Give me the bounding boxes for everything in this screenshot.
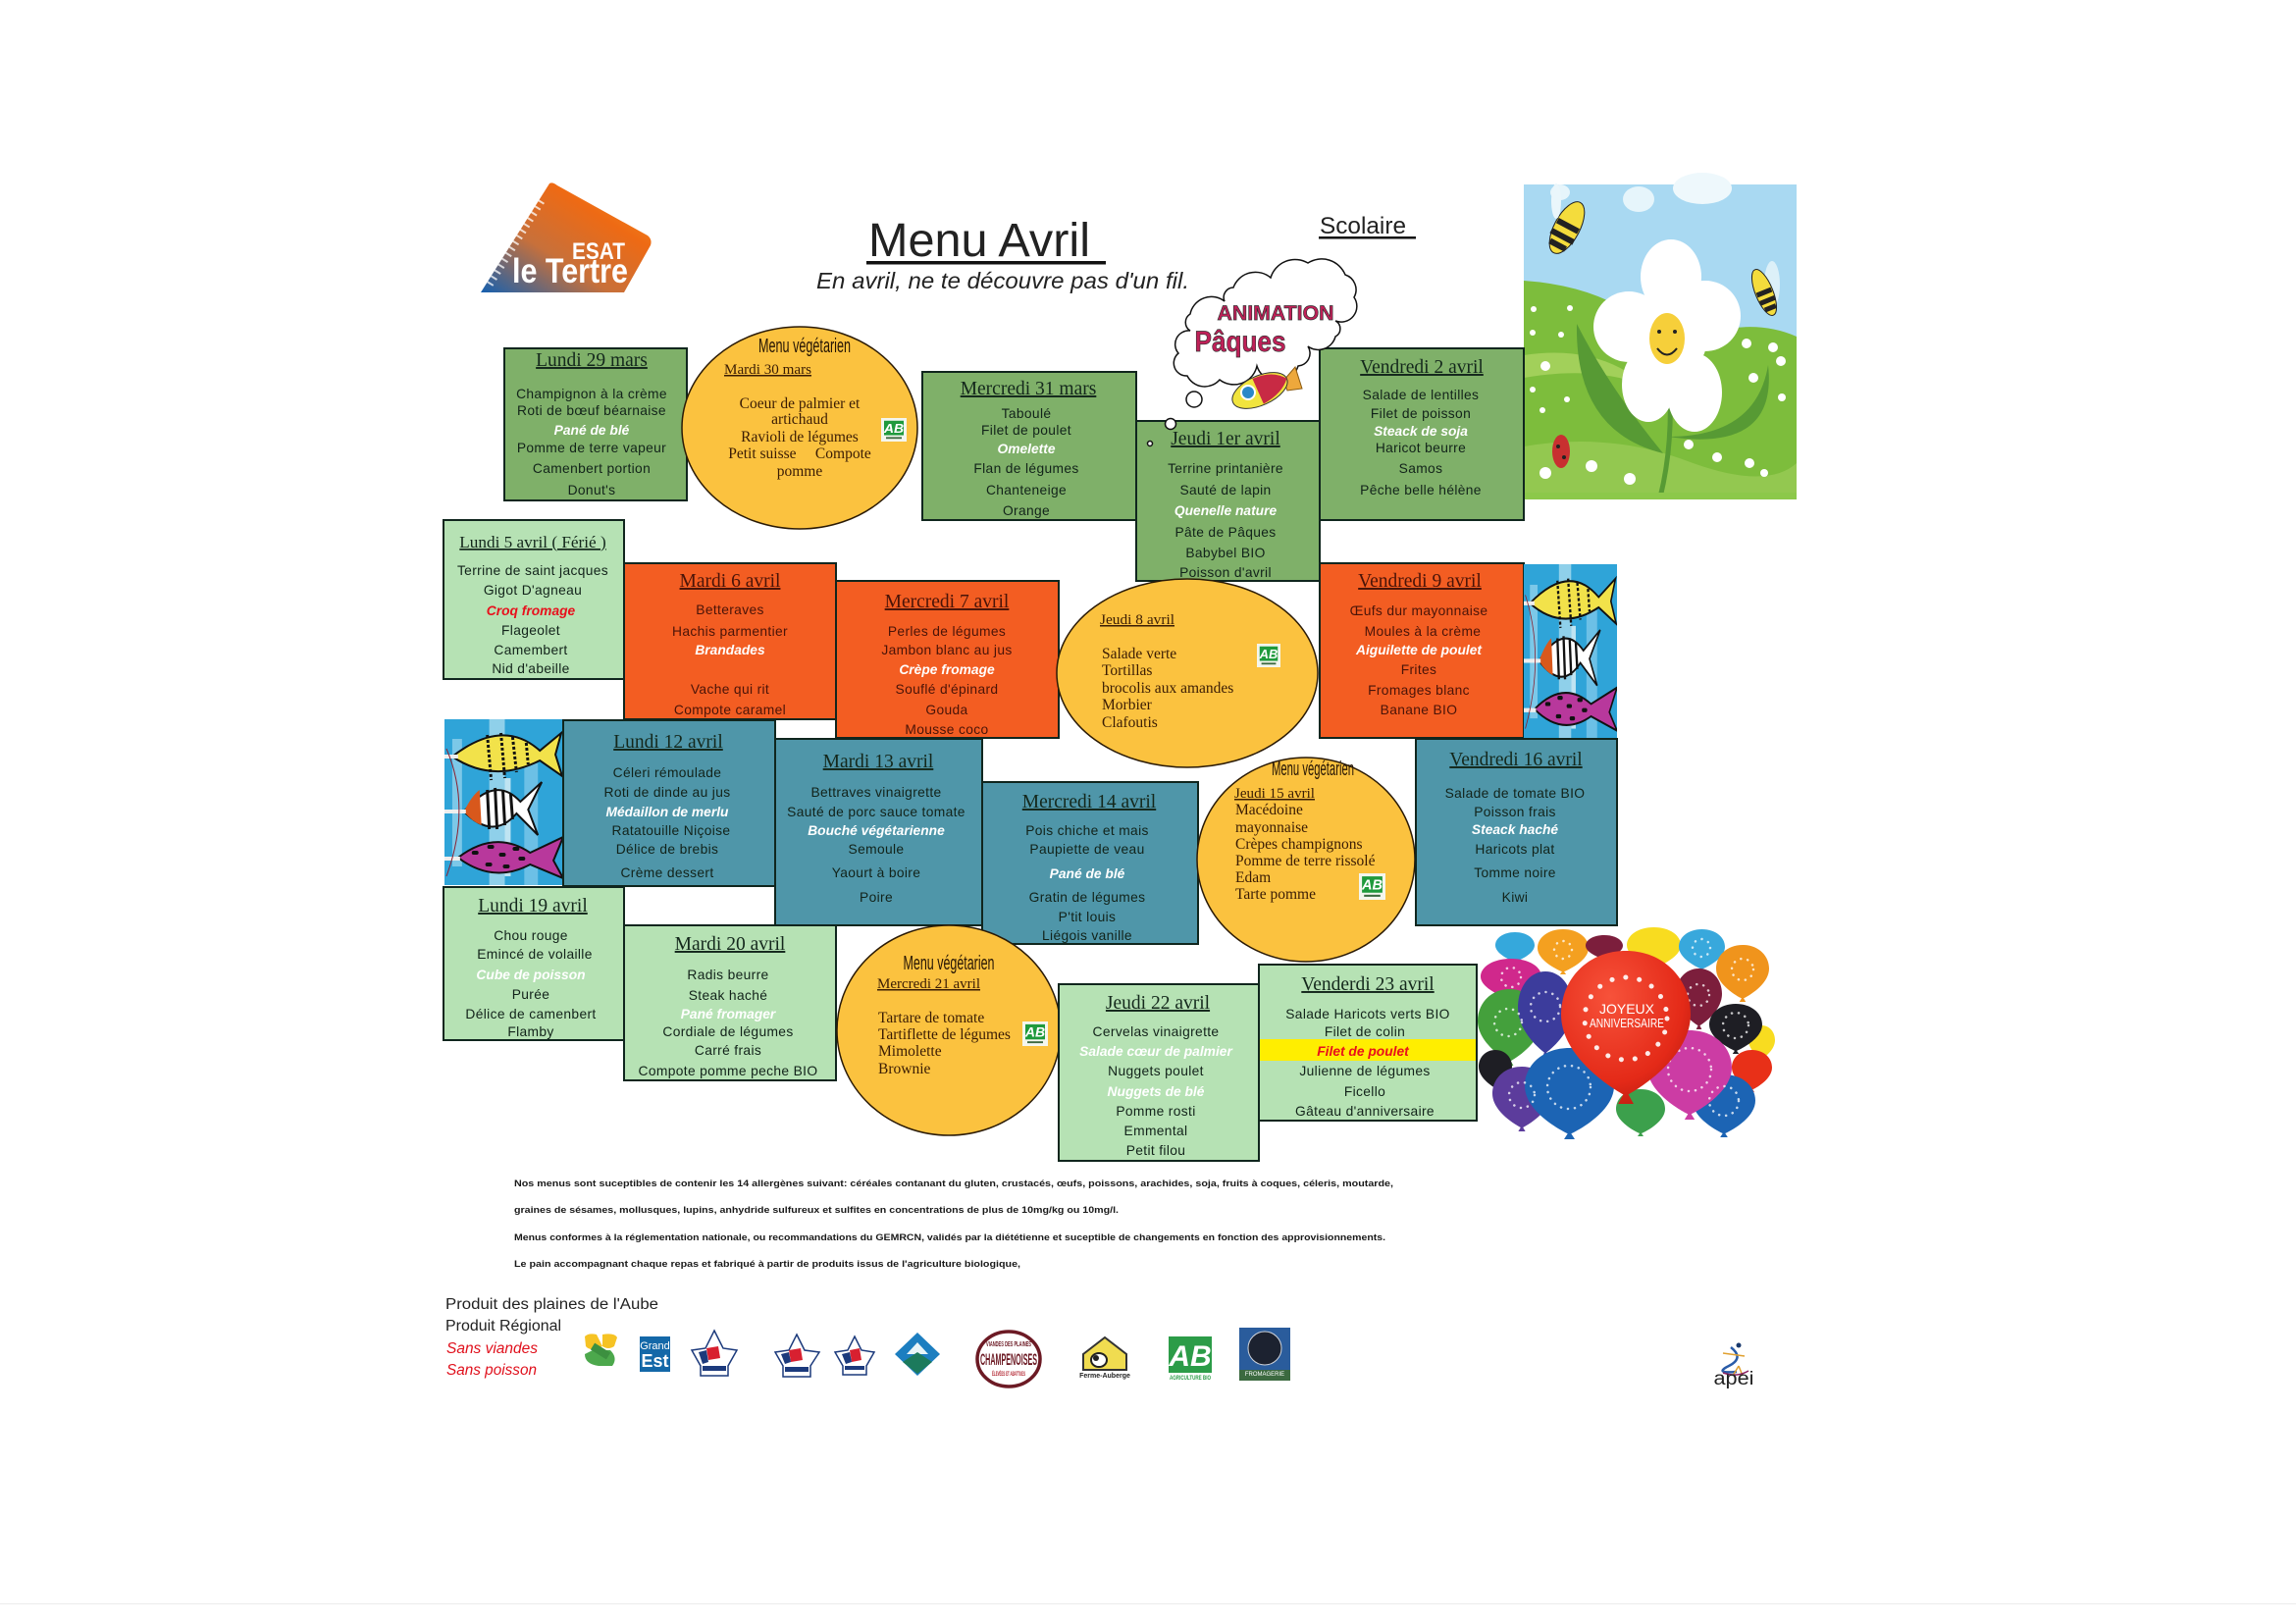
menu items: Champignon à la crème <box>516 387 667 401</box>
logo: origine française star <box>692 1331 737 1376</box>
menu items: Gâteau d'anniversaire <box>1295 1104 1435 1119</box>
panel: Mercredi 14 avril <box>982 782 1198 944</box>
panel: Mardi 13 avril <box>775 739 982 925</box>
menu items: Tartare de tomate <box>878 1010 984 1026</box>
menu items <box>1025 823 1149 943</box>
panel: Jeudi 1er avril <box>1136 421 1320 581</box>
menu items: Steak haché <box>689 988 767 1003</box>
illustration: fish right <box>1524 564 1617 738</box>
menu items: Sauté de lapin <box>1179 483 1272 497</box>
heading: Vendredi 2 avril <box>1360 357 1484 378</box>
menu items <box>1360 388 1482 497</box>
heading: Menu végétarien <box>903 953 995 974</box>
panel: Mardi 6 avril <box>624 563 836 719</box>
icon: AB bio <box>1022 1021 1048 1046</box>
menu items <box>639 968 817 1078</box>
panel: Lundi 19 avril <box>444 887 624 1040</box>
menu items: Cervelas vinaigrette <box>1093 1024 1219 1039</box>
menu items: Purée <box>512 987 549 1002</box>
menu items <box>1350 603 1487 717</box>
menu items: Pané fromager <box>681 1007 776 1021</box>
menu items: Poisson d'avril <box>1179 565 1272 580</box>
menu items: Filet de poisson <box>1371 406 1471 421</box>
legend <box>445 1296 658 1379</box>
legend: Produit des plaines de l'Aube <box>445 1296 658 1313</box>
logo: ferme <box>1079 1337 1130 1380</box>
menu items: Petit suisse Compote <box>728 445 871 462</box>
heading: Lundi 19 avril <box>478 896 588 916</box>
menu items: Petit filou <box>1126 1143 1185 1158</box>
menu items: Pomme de terre rissolé <box>1235 853 1376 869</box>
menu items: Radis beurre <box>687 968 769 982</box>
panel: Mercredi 31 mars <box>922 372 1136 520</box>
menu items: Délice de brebis <box>616 842 718 857</box>
menu items: Salade cœur de palmier <box>1079 1044 1232 1059</box>
menu items: Tartiflette de légumes <box>878 1026 1011 1043</box>
menu items: Frites <box>1401 662 1436 677</box>
menu items: Flageolet <box>501 623 560 638</box>
menu items: Souflé d'épinard <box>896 682 998 697</box>
menu items <box>465 928 597 1039</box>
menu items <box>516 387 667 497</box>
heading: Lundi 5 avril ( Férié ) <box>459 533 606 551</box>
menu items: Haricot beurre <box>1376 441 1466 455</box>
menu items: Carré frais <box>695 1043 761 1058</box>
heading: Mercredi 7 avril <box>885 592 1010 612</box>
logo: origine star 2 <box>775 1335 819 1377</box>
menu items: Edam <box>1235 869 1271 886</box>
icon: AB bio <box>1359 873 1385 900</box>
logo: ferme: Ferme-Auberge <box>1079 1373 1130 1380</box>
menu items: Salade verte <box>1102 646 1176 662</box>
menu items: Babybel BIO <box>1185 546 1266 560</box>
menu items: Médaillon de merlu <box>606 805 729 819</box>
heading: Mardi 6 avril <box>680 571 781 592</box>
menu items: Tarte pomme <box>1235 886 1316 903</box>
menu items: Compote caramel <box>674 703 786 717</box>
menu items: Flamby <box>507 1024 554 1039</box>
heading: Mercredi 14 avril <box>1022 792 1157 812</box>
menu items: Terrine printanière <box>1168 461 1283 476</box>
menu items: Julienne de légumes <box>1299 1064 1431 1078</box>
heading: Mardi 13 avril <box>823 752 934 772</box>
menu items: Chanteneige <box>986 483 1067 497</box>
text block: allergen and compliance notes: Menus conformes à la réglementation nationale, ou recommandations du GEMRCN, validés par la diététienne et suceptible de changements en fonction des approvisionnements. <box>514 1232 1385 1243</box>
logo: ESAT le Tertre: ESAT <box>572 238 625 265</box>
menu items: Filet de poulet <box>981 423 1071 438</box>
menu items: Coeur de palmier et <box>740 395 861 412</box>
title: Menu Avril <box>868 215 1090 267</box>
menu items: pomme <box>777 463 822 480</box>
panel: Venderdi 23 avril <box>1259 965 1477 1121</box>
menu items: Tortillas <box>1102 662 1152 679</box>
callout: animation Pâques thought bubble: ANIMATION <box>1217 302 1334 325</box>
logo: fromagerie: FROMAGERIE <box>1245 1372 1284 1378</box>
menu items: Orange <box>1003 503 1050 518</box>
illustration: birthday balloons <box>1478 927 1775 1139</box>
logo: apei: apei <box>1713 1369 1754 1389</box>
menu items <box>1079 1024 1232 1158</box>
menu items: Salade de lentilles <box>1363 388 1479 402</box>
menu items <box>1235 802 1376 903</box>
panel: Lundi 12 avril <box>563 720 775 886</box>
menu items: Morbier <box>1102 697 1153 713</box>
menu items: Pâte de Pâques <box>1174 525 1277 540</box>
menu items: Haricots plat <box>1475 842 1555 857</box>
menu items: Délice de camenbert <box>465 1007 597 1021</box>
legend: Produit Régional <box>445 1318 561 1335</box>
menu items: artichaud <box>771 411 828 428</box>
menu items: Steack de soja <box>1374 424 1468 439</box>
heading: Lundi 12 avril <box>613 732 723 753</box>
menu items: Brownie <box>878 1061 930 1077</box>
menu items: Paupiette de veau <box>1029 842 1145 857</box>
logo: montagne diamond <box>895 1333 940 1376</box>
menu items <box>1168 461 1283 580</box>
callout: animation Pâques thought bubble <box>1148 259 1357 445</box>
date: Mercredi 21 avril <box>877 976 980 992</box>
menu items: Poire <box>860 890 893 905</box>
logo: fromagerie <box>1239 1328 1290 1381</box>
menu items <box>973 406 1079 518</box>
text block: allergen and compliance notes: Nos menus sont suceptibles de contenir les 14 allergènes suivant: céréales contanant du gluten, crustacés, œufs, poissons, arachides, soja, fruits à coques, céleris, moutarde, <box>514 1178 1393 1189</box>
menu items: Jambon blanc au jus <box>881 643 1013 657</box>
panel: Jeudi 22 avril <box>1059 984 1259 1161</box>
menu items: Cordiale de légumes <box>662 1024 794 1039</box>
heading: Jeudi 22 avril <box>1106 993 1211 1014</box>
menu items: Steack haché <box>1472 822 1558 837</box>
menu items: Pané de blé <box>1050 866 1125 881</box>
heading: Lundi 29 mars <box>536 350 648 371</box>
menu items: Salade de tomate BIO <box>1445 786 1585 801</box>
menu items: Fromages blanc <box>1368 683 1470 698</box>
logo: AB agriculture biologique: AGRICULTURE BIO <box>1170 1376 1211 1382</box>
menu items <box>881 624 1013 737</box>
menu items: Hachis parmentier <box>672 624 788 639</box>
menu items: Pêche belle hélène <box>1360 483 1482 497</box>
logo: origine star 3 <box>835 1336 874 1375</box>
illustration: birthday balloons: JOYEUX <box>1599 1001 1655 1017</box>
menu items: Poisson frais <box>1474 805 1556 819</box>
menu items: Pané de blé <box>554 423 630 438</box>
icon: AB bio <box>1257 644 1280 667</box>
menu items: Roti de bœuf béarnaise <box>517 403 666 418</box>
text block: allergen and compliance notes: Le pain accompagnant chaque repas et fabriqué à partir de produits issus de l'agriculture biologique, <box>514 1259 1020 1270</box>
menu items: Banane BIO <box>1381 703 1457 717</box>
menu items: Macédoine <box>1235 802 1303 818</box>
panel: Vendredi 16 avril <box>1416 739 1617 925</box>
panel: Mardi 30 mars (végétarien) <box>682 327 917 529</box>
menu items: Ravioli de légumes <box>741 429 859 445</box>
menu items: Betteraves <box>696 602 764 617</box>
menu items: Yaourt à boire <box>832 865 920 880</box>
menu items: Mousse coco <box>905 722 989 737</box>
menu items: Filet de colin <box>1325 1024 1405 1039</box>
logo: Viandes des plaines champenoises <box>977 1332 1040 1387</box>
legend: Sans viandes <box>446 1340 538 1357</box>
logo: ESAT le Tertre <box>481 183 652 292</box>
icon: April fish <box>1226 365 1302 416</box>
logo: AB agriculture biologique <box>1168 1336 1212 1382</box>
subtitle: En avril, ne te découvre pas d'un fil. <box>816 268 1189 293</box>
date: Mardi 30 mars <box>724 362 811 378</box>
menu items <box>1102 646 1233 731</box>
highlight band <box>1260 1039 1476 1061</box>
callout: animation Pâques thought bubble: Pâques <box>1195 326 1285 358</box>
menu items: Perles de légumes <box>888 624 1006 639</box>
menu items: Semoule <box>849 842 904 857</box>
menu items <box>728 395 871 480</box>
logo: Viandes des plaines champenoises: VIANDES DES PLAINES <box>986 1341 1031 1348</box>
menu items: Roti de dinde au jus <box>604 785 730 800</box>
menu items: Emincé de volaille <box>477 947 593 962</box>
panel: Jeudi 15 avril (végétarien) <box>1197 758 1415 962</box>
heading: Vendredi 9 avril <box>1358 571 1482 592</box>
heading: Jeudi 1er avril <box>1171 429 1280 449</box>
panel: Mercredi 7 avril <box>836 581 1059 738</box>
illustration: fish left <box>444 719 563 885</box>
menu items: Kiwi <box>1502 890 1528 905</box>
menu items: Ficello <box>1344 1084 1385 1099</box>
menu items: Crème dessert <box>620 865 714 880</box>
menu items <box>457 563 608 676</box>
menu items: Quenelle nature <box>1174 503 1277 518</box>
menu items: Aiguilette de poulet <box>1355 643 1483 657</box>
menu items: Gratin de légumes <box>1029 890 1145 905</box>
heading: Mardi 20 avril <box>675 934 786 955</box>
panel: Vendredi 9 avril <box>1320 563 1524 738</box>
panel: Mercredi 21 avril (végétarien) <box>837 925 1061 1135</box>
logo: AB agriculture biologique: AB <box>1168 1340 1212 1373</box>
menu items: Compote pomme peche BIO <box>639 1064 817 1078</box>
menu items: Nid d'abeille <box>492 661 570 676</box>
menu items: Vache qui rit <box>691 682 769 697</box>
menu items: Crèpes champignons <box>1235 836 1363 853</box>
menu items: Liégois vanille <box>1042 928 1132 943</box>
text block: allergen and compliance notes <box>514 1178 1393 1270</box>
menu items: Sauté de porc sauce tomate <box>787 805 965 819</box>
menu items: Ratatouille Niçoise <box>612 823 730 838</box>
panel: Mardi 20 avril <box>624 925 836 1080</box>
logo: Grand Est: Grand <box>640 1340 670 1352</box>
menu items <box>1445 786 1585 905</box>
menu items <box>604 765 730 880</box>
legend: Sans poisson <box>446 1362 537 1379</box>
menu items: Crèpe fromage <box>899 662 995 677</box>
menu items: mayonnaise <box>1235 819 1308 836</box>
menu items: Camembert <box>494 643 568 657</box>
menu items: Bouché végétarienne <box>808 823 945 838</box>
heading: Vendredi 16 avril <box>1449 750 1583 770</box>
heading: Venderdi 23 avril <box>1301 974 1435 995</box>
menu items <box>787 785 965 905</box>
illustration: flower in meadow <box>1524 173 1797 499</box>
menu items: Emmental <box>1124 1124 1187 1138</box>
menu items: Œufs dur mayonnaise <box>1350 603 1487 618</box>
menu items: Terrine de saint jacques <box>457 563 608 578</box>
menu items: Croq fromage <box>487 603 576 618</box>
menu items: Pomme de terre vapeur <box>517 441 666 455</box>
menu items: Salade Haricots verts BIO <box>1285 1007 1450 1021</box>
date: Jeudi 15 avril <box>1234 786 1315 802</box>
menu items: Nuggets poulet <box>1108 1064 1204 1078</box>
menu items: Gigot D'agneau <box>484 583 582 598</box>
menu items: Cube de poisson <box>476 968 586 982</box>
label: Scolaire: Scolaire <box>1320 213 1406 239</box>
menu items: brocolis aux amandes <box>1102 680 1233 697</box>
panel: Lundi 29 mars <box>504 348 687 500</box>
menu items: Moules à la crème <box>1365 624 1481 639</box>
logo: Aube S <box>585 1334 617 1366</box>
logo row: quality labels <box>585 1328 1290 1387</box>
menu items <box>878 1010 1011 1077</box>
menu items: Filet de poulet <box>1317 1044 1410 1059</box>
logo: apei <box>1713 1342 1754 1389</box>
logo row: quality labels: CHAMPENOISES <box>980 1350 1037 1369</box>
menu items: Pois chiche et mais <box>1025 823 1149 838</box>
menu items: Chou rouge <box>494 928 568 943</box>
menu items: Céleri rémoulade <box>613 765 721 780</box>
logo: Viandes des plaines champenoises: ÉLEVÉES ET ABATTUES <box>992 1370 1025 1378</box>
menu items: Tomme noire <box>1474 865 1556 880</box>
menu items: Mimolette <box>878 1043 942 1060</box>
menu items: Camenbert portion <box>533 461 651 476</box>
menu items: Flan de légumes <box>973 461 1079 476</box>
logo: ESAT le Tertre: le Tertre <box>512 252 628 290</box>
menu items <box>672 602 788 717</box>
heading: Menu végétarien <box>1272 759 1354 780</box>
menu items: Nuggets de blé <box>1108 1084 1205 1099</box>
menu items: Pomme rosti <box>1116 1104 1196 1119</box>
panel: Lundi 5 avril <box>444 520 624 679</box>
date: Jeudi 8 avril <box>1100 612 1174 628</box>
logo: Grand Est <box>640 1336 670 1372</box>
heading: Menu végétarien <box>758 336 851 357</box>
illustration: birthday balloons: ANNIVERSAIRE <box>1590 1016 1664 1030</box>
menu items <box>1285 1007 1450 1119</box>
menu items: Brandades <box>695 643 765 657</box>
text block: allergen and compliance notes: graines de sésames, mollusques, lupins, anhydride sulfureux et sulfites en concentrations de plus de 10mg/kg ou 10mg/l. <box>514 1205 1119 1216</box>
menu items: Clafoutis <box>1102 714 1158 731</box>
menu items: Samos <box>1399 461 1442 476</box>
logo: Grand Est: Est <box>641 1351 669 1371</box>
menu items: Omelette <box>997 442 1056 456</box>
icon: AB bio <box>881 418 907 442</box>
heading: Mercredi 31 mars <box>961 379 1096 399</box>
menu items: Gouda <box>925 703 968 717</box>
menu items: Taboulé <box>1002 406 1051 421</box>
menu items: Donut's <box>568 483 615 497</box>
menu items: Bettraves vinaigrette <box>810 785 942 800</box>
menu items: P'tit louis <box>1059 910 1116 924</box>
panel: Vendredi 2 avril <box>1320 348 1524 520</box>
panel: Jeudi 8 avril (végétarien) <box>1057 579 1318 767</box>
